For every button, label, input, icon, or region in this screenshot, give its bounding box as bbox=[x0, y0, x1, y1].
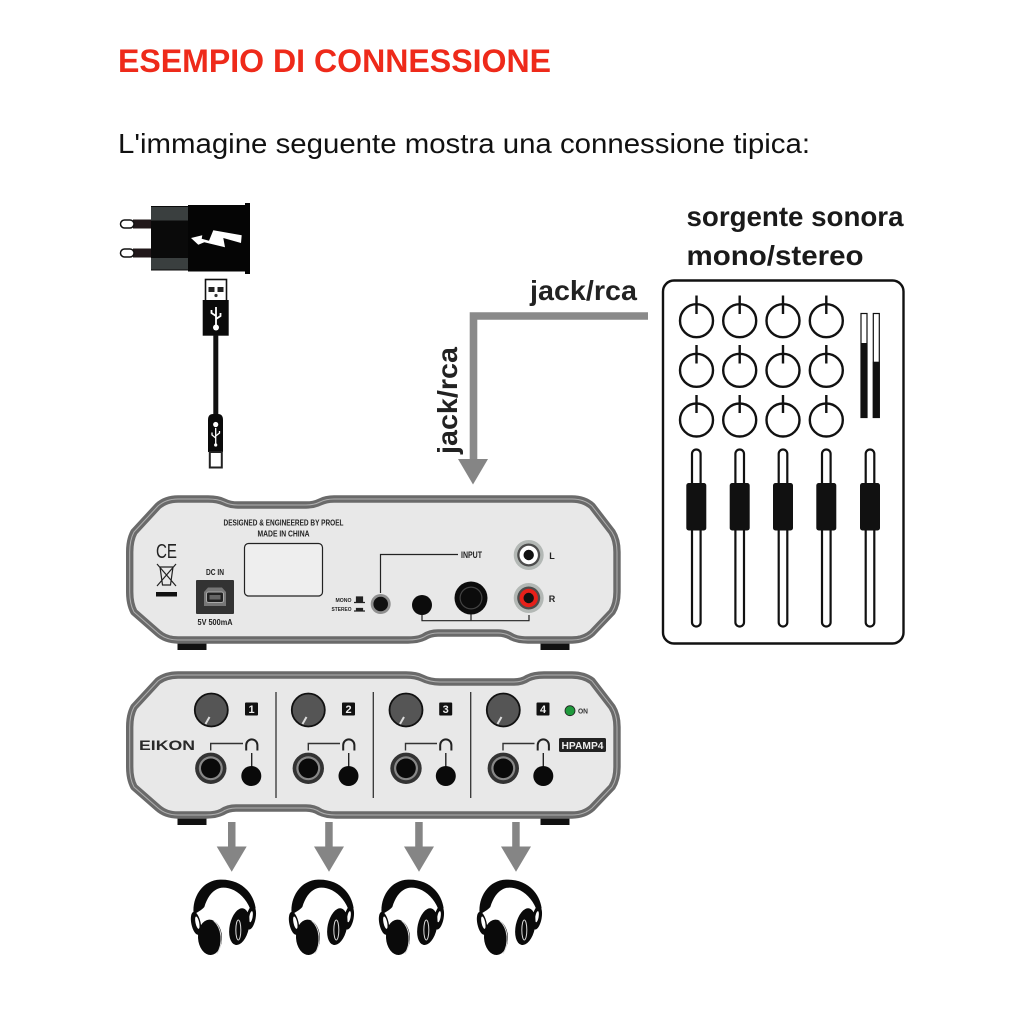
manufacturer text: MADE IN CHINA bbox=[258, 529, 310, 538]
adapter body bbox=[151, 203, 250, 274]
arrow: jack/rca cable from source to input bbox=[458, 316, 648, 484]
RCA R: R bbox=[549, 594, 556, 604]
channel 3: 3 bbox=[443, 704, 449, 716]
icon: headphones 1 bbox=[189, 880, 258, 956]
USB A plug bbox=[203, 280, 229, 336]
mono/stereo switch bbox=[332, 594, 391, 614]
USB B plug bbox=[208, 414, 223, 468]
power LED bbox=[565, 706, 588, 716]
input label with lead line: INPUT bbox=[461, 550, 482, 560]
CE mark: CE bbox=[156, 541, 177, 563]
RCA R bbox=[514, 583, 556, 613]
icon: WEEE bin bbox=[156, 564, 177, 596]
mixer faders bbox=[686, 450, 880, 626]
channel 4 bbox=[487, 694, 553, 786]
channel dividers bbox=[276, 692, 471, 798]
icon: power adapter with USB cable bbox=[120, 203, 250, 468]
arrow: output 4 bbox=[501, 822, 531, 872]
USB cable bbox=[213, 335, 218, 415]
channel 2 bbox=[292, 694, 358, 786]
label: sound source: mono/stereo bbox=[686, 240, 864, 271]
channel 3 bbox=[390, 694, 456, 786]
label: sound source bbox=[686, 201, 904, 271]
front feet bbox=[178, 816, 570, 825]
rear casing bbox=[130, 499, 617, 640]
channel 1 bbox=[195, 694, 261, 786]
icon: headphones 4 bbox=[475, 880, 544, 956]
channel 1: 1 bbox=[248, 704, 255, 716]
power LED: ON bbox=[578, 708, 588, 716]
adapter pins bbox=[120, 220, 151, 258]
mono/stereo switch: STEREO bbox=[332, 607, 352, 613]
RCA L: L bbox=[549, 551, 555, 561]
arrow: output 3 bbox=[404, 822, 434, 872]
arrow: output 2 bbox=[314, 822, 344, 872]
mono/stereo switch: MONO bbox=[336, 598, 352, 604]
front casing bbox=[130, 675, 617, 815]
title: ESEMPIO DI CONNESSIONE bbox=[118, 43, 551, 79]
rear feet bbox=[178, 641, 570, 650]
input jacks bbox=[412, 582, 529, 621]
mixer knobs bbox=[680, 296, 843, 436]
icon: headphones 3 bbox=[377, 880, 446, 956]
mixer level meters bbox=[860, 314, 880, 418]
icon: headphones 2 bbox=[287, 880, 356, 956]
label area bbox=[244, 544, 322, 596]
intro text: L'immagine seguente mostra una connessione tipica: bbox=[118, 128, 810, 159]
EIKON logo: EIKON bbox=[139, 737, 195, 753]
DC input socket: DC IN bbox=[206, 568, 224, 577]
channel 2: 2 bbox=[345, 704, 352, 716]
DC input socket: 5V 500mA bbox=[198, 618, 233, 627]
label: jack/rca horizontal: jack/rca bbox=[529, 275, 638, 306]
manufacturer text bbox=[224, 518, 344, 538]
panel: rear of HPAMP4 bbox=[130, 499, 617, 650]
DC input socket bbox=[196, 568, 234, 627]
panel: front of HPAMP4 bbox=[130, 675, 617, 825]
arrow: output 1 bbox=[217, 822, 247, 872]
input label with lead line bbox=[380, 550, 482, 593]
RCA L bbox=[514, 540, 555, 570]
label: sound source: sorgente sonora bbox=[686, 201, 904, 232]
manufacturer text: DESIGNED & ENGINEERED BY PROEL bbox=[224, 518, 344, 528]
channel 4: 4 bbox=[540, 704, 547, 716]
HPAMP4 badge: HPAMP4 bbox=[562, 740, 604, 752]
panel: mixer bbox=[663, 280, 904, 644]
label: jack/rca vertical: jack/rca bbox=[432, 346, 463, 455]
